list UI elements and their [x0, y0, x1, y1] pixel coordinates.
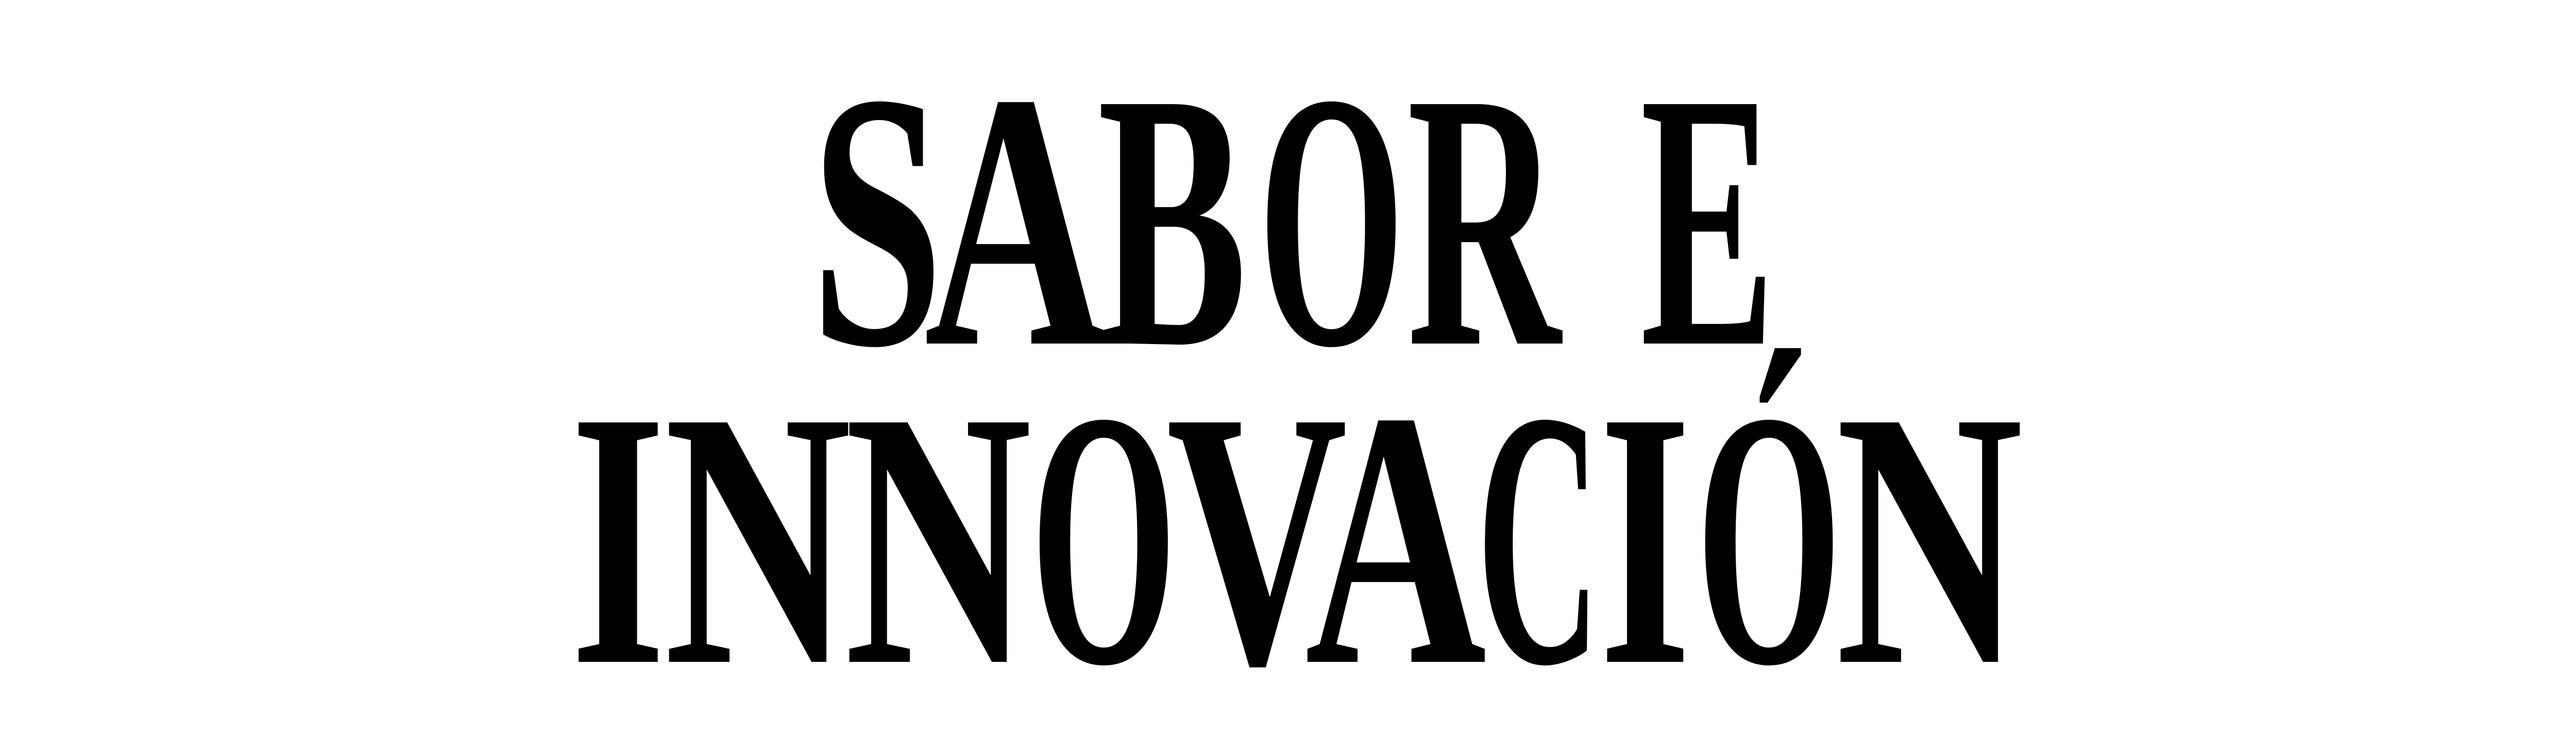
- title line: SABOR E: R: [1407, 18, 1563, 423]
- title line: SABOR E: [810, 18, 1775, 423]
- title line: INNOVACIÓN: O: [1030, 337, 1177, 742]
- title line: INNOVACIÓN: A: [1305, 336, 1486, 741]
- title line: INNOVACIÓN: Ó: [1696, 336, 1842, 742]
- title line: SABOR E: B: [1097, 19, 1247, 423]
- title line: SABOR E: S: [810, 18, 944, 423]
- title line: INNOVACIÓN: I: [1599, 336, 1691, 741]
- title line: SABOR E: E: [1640, 19, 1775, 423]
- title line: INNOVACIÓN: [570, 336, 2023, 742]
- title line: INNOVACIÓN: I: [570, 336, 666, 741]
- title line: INNOVACIÓN: N: [844, 336, 1032, 742]
- title line: INNOVACIÓN: C: [1477, 336, 1600, 741]
- title line: SABOR E: A: [924, 18, 1107, 423]
- title line: SABOR E: O: [1258, 19, 1405, 423]
- title line: INNOVACIÓN: V: [1166, 336, 1348, 741]
- title line: INNOVACIÓN: N: [664, 336, 852, 742]
- title line: INNOVACIÓN: N: [1836, 336, 2023, 742]
